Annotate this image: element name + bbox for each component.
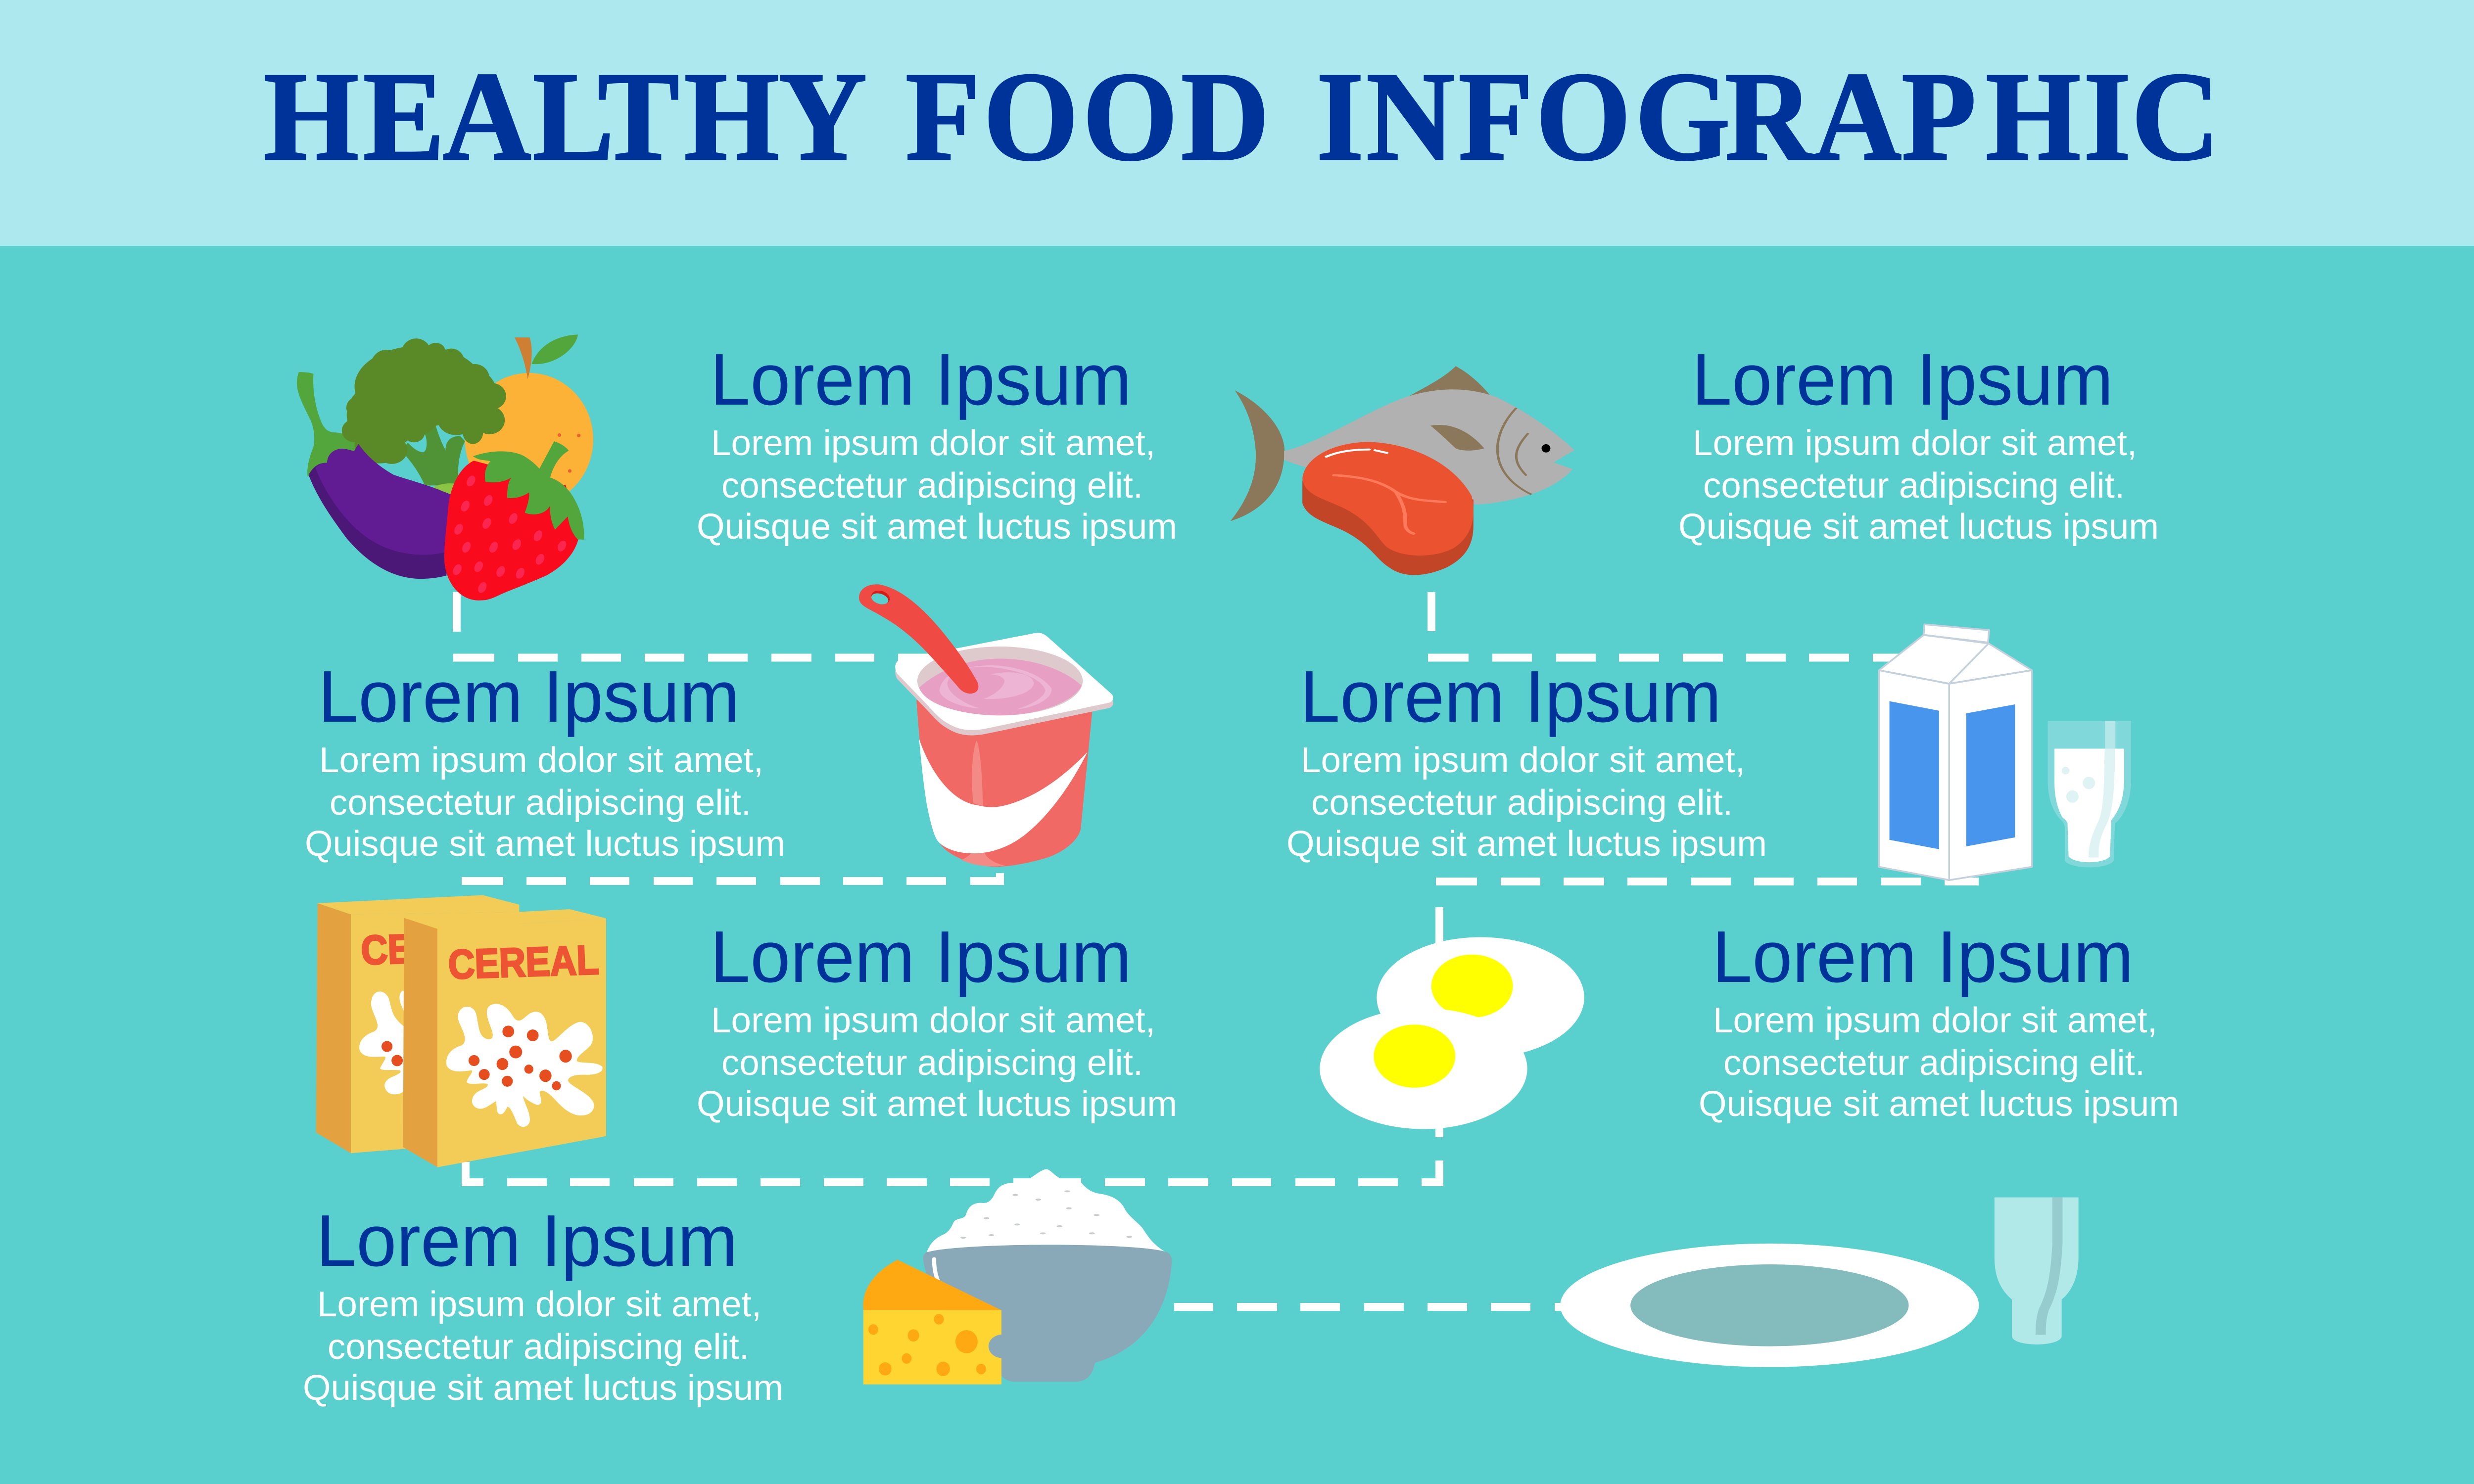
icon: rice bowl and cheese — [863, 1169, 1172, 1385]
text block: fish and meat: Lorem ipsum dolor sit amet, — [1693, 423, 2137, 463]
text block: eggs: consectetur adipiscing elit. — [1723, 1043, 2145, 1083]
text block: rice and cheese: Lorem Ipsum — [316, 1200, 738, 1282]
icon: fish and steak — [1231, 366, 1574, 575]
icon: cereal boxes: CEREAL — [447, 937, 600, 988]
text block: fish and meat: Lorem Ipsum — [1692, 339, 2113, 420]
text block: fish and meat: consectetur adipiscing elit. — [1703, 466, 2125, 506]
title: HEALTHY — [264, 46, 867, 187]
text block: yogurt: Lorem ipsum dolor sit amet, — [319, 741, 763, 780]
text block: eggs: Lorem Ipsum — [1712, 916, 2134, 998]
dashed connector path — [453, 592, 1979, 1307]
text block: yogurt: Quisque sit amet luctus ipsum — [305, 824, 785, 864]
text block: cereal — [697, 916, 1177, 1124]
text block: cereal: consectetur adipiscing elit. — [721, 1043, 1143, 1083]
text block: eggs — [1699, 916, 2179, 1124]
text block: vegetables and fruit — [697, 339, 1177, 547]
icon: yogurt cup with spoon — [859, 584, 1113, 867]
icon: cereal boxes: CE — [360, 926, 413, 974]
icon: empty plate — [1560, 1244, 1979, 1367]
title: INFOGRAPHIC — [1316, 46, 2220, 187]
icon: glass of milk — [2048, 721, 2131, 867]
text block: eggs: Lorem ipsum dolor sit amet, — [1713, 1001, 2157, 1040]
text block: fish and meat: Quisque sit amet luctus ipsum — [1678, 507, 2159, 547]
text block: eggs: Quisque sit amet luctus ipsum — [1699, 1084, 2179, 1124]
text block: cereal: Lorem Ipsum — [710, 916, 1132, 998]
header band — [0, 0, 2474, 246]
text block: rice and cheese: consectetur adipiscing elit. — [328, 1327, 749, 1367]
text block: vegetables and fruit: Lorem Ipsum — [710, 339, 1132, 420]
icon: empty glass — [1995, 1198, 2079, 1345]
icon: vegetables and fruit — [297, 334, 593, 601]
text block: yogurt: consectetur adipiscing elit. — [330, 783, 751, 823]
text block: vegetables and fruit: consectetur adipiscing elit. — [721, 466, 1143, 506]
title: FOOD — [905, 46, 1269, 187]
text block: yogurt: Lorem Ipsum — [318, 656, 740, 738]
text block: milk: Quisque sit amet luctus ipsum — [1286, 824, 1767, 864]
icon: milk carton — [1879, 624, 2032, 880]
text block: rice and cheese — [303, 1200, 783, 1408]
text block: fish and meat — [1678, 339, 2159, 547]
title — [264, 46, 2220, 187]
text block: rice and cheese: Quisque sit amet luctus ipsum — [303, 1368, 783, 1408]
text block: rice and cheese: Lorem ipsum dolor sit amet, — [317, 1285, 761, 1324]
text block: vegetables and fruit: Lorem ipsum dolor sit amet, — [711, 423, 1155, 463]
text block: cereal: Quisque sit amet luctus ipsum — [697, 1084, 1177, 1124]
text block: milk: Lorem Ipsum — [1300, 656, 1721, 738]
text block: milk — [1286, 656, 1767, 864]
text block: cereal: Lorem ipsum dolor sit amet, — [711, 1001, 1155, 1040]
icon: fried eggs — [1320, 937, 1584, 1129]
text block: milk: consectetur adipiscing elit. — [1311, 783, 1733, 823]
text block: yogurt — [305, 656, 785, 864]
text block: milk: Lorem ipsum dolor sit amet, — [1301, 741, 1745, 780]
text block: vegetables and fruit: Quisque sit amet luctus ipsum — [697, 507, 1177, 547]
icon: cereal boxes — [316, 895, 606, 1167]
